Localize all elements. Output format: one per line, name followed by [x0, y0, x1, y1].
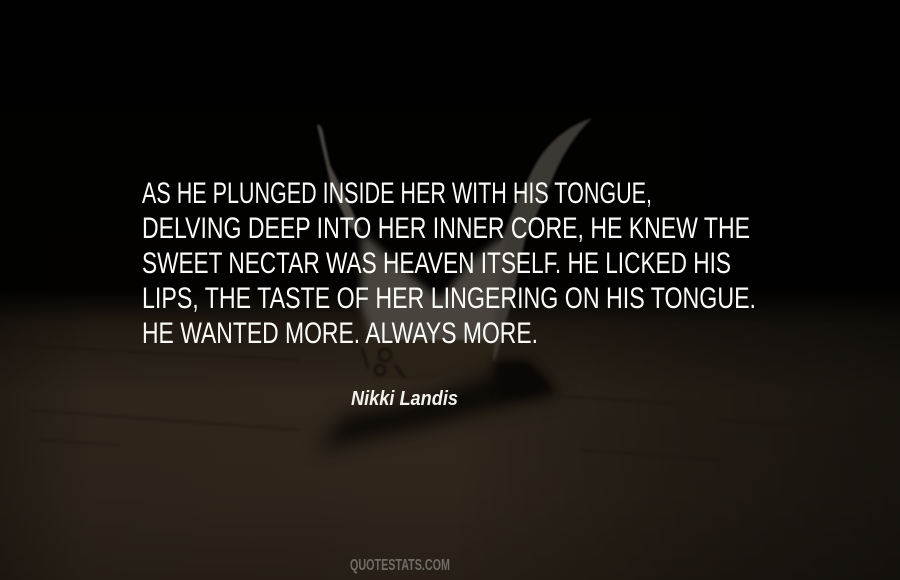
quote text: SWEET NECTAR WAS HEAVEN ITSELF. HE LICKED HIS — [142, 247, 731, 280]
table shadow — [318, 360, 560, 450]
printed marks — [362, 348, 405, 378]
wood grain — [0, 345, 880, 460]
author: Nikki Landis — [351, 388, 458, 410]
base — [358, 340, 495, 378]
watermark: QUOTESTATS.COM — [350, 557, 450, 574]
origami figure — [317, 118, 592, 378]
quote text: HE WANTED MORE. ALWAYS MORE. — [142, 317, 538, 350]
body — [360, 232, 505, 345]
left spike — [317, 125, 362, 232]
quote text: AS HE PLUNGED INSIDE HER WITH HIS TONGUE, — [142, 177, 652, 210]
right wing — [478, 118, 592, 362]
quote text — [142, 177, 756, 350]
